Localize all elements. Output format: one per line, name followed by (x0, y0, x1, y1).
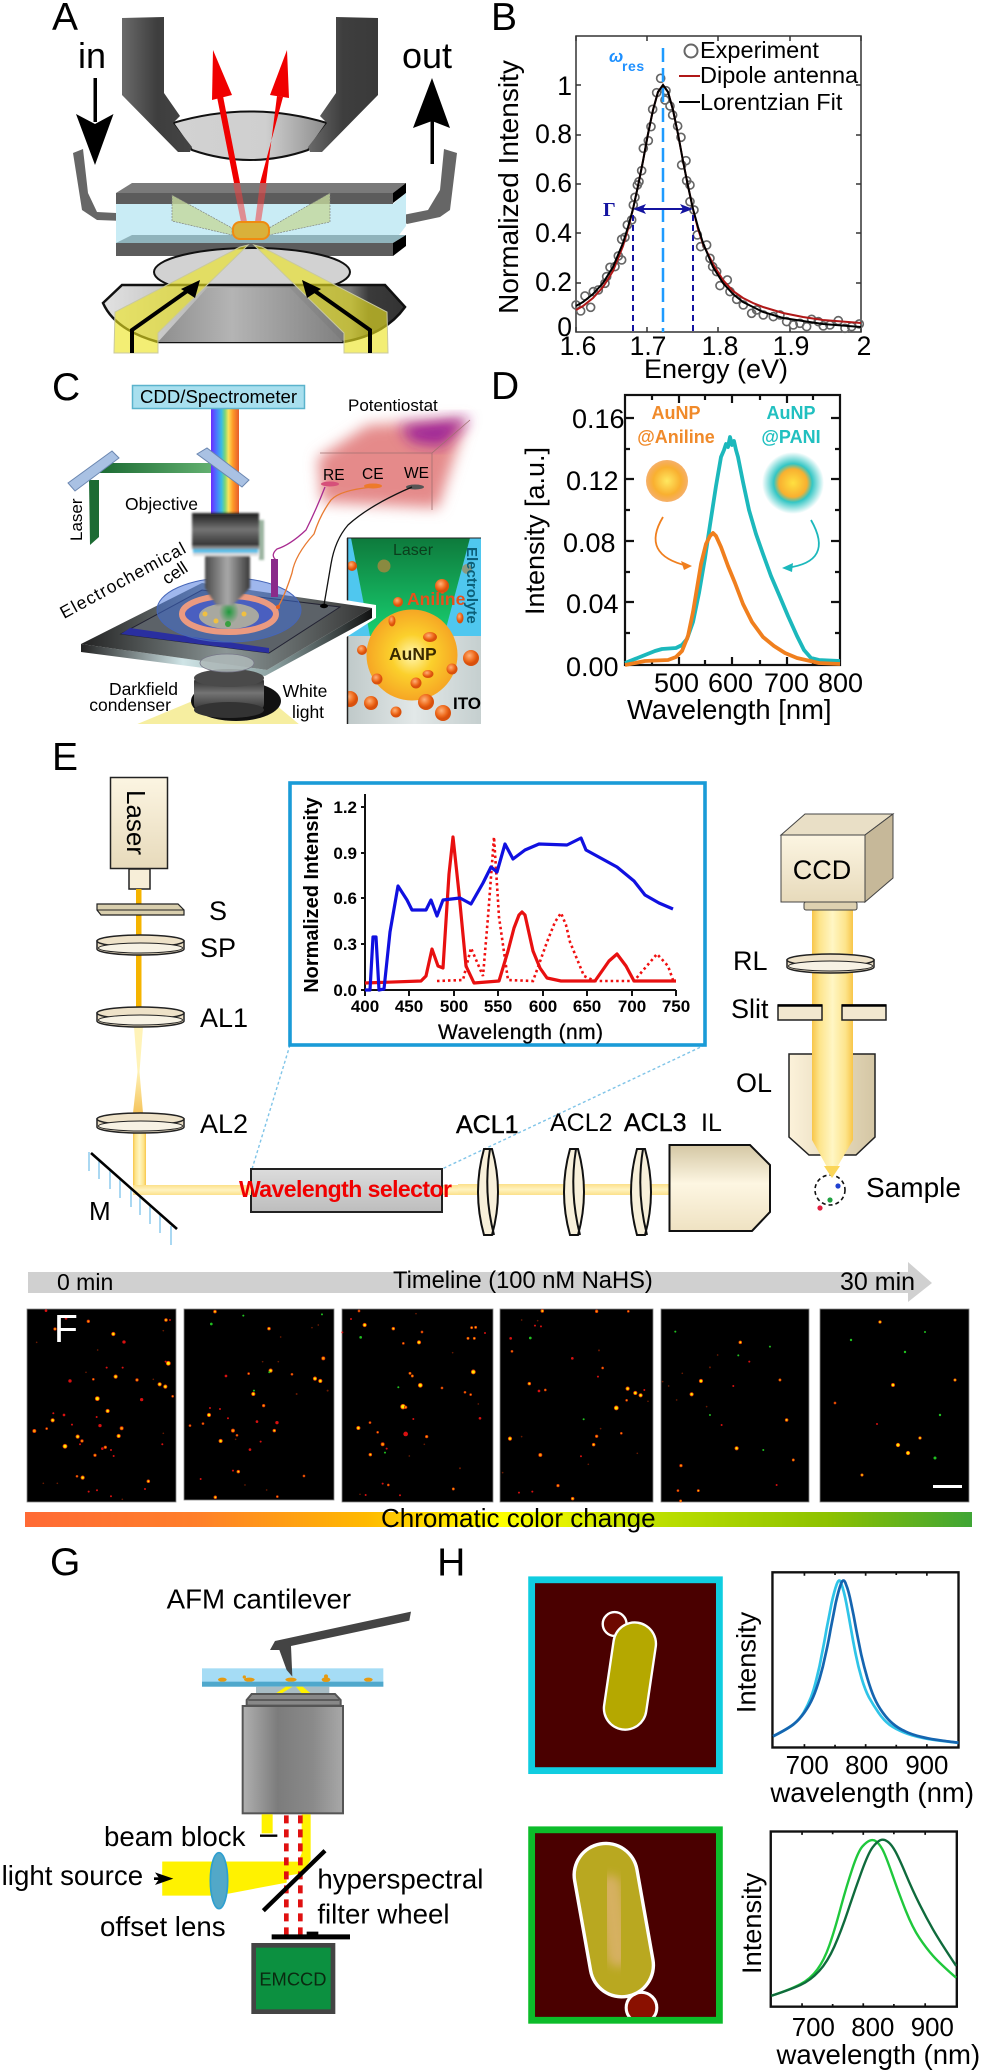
legend: Dipole antenna (700, 62, 859, 88)
dichroic mirror (263, 1851, 325, 1911)
linewidth Gamma marker (603, 199, 693, 332)
legend: Lorentzian Fit (700, 89, 843, 115)
filter wheel: hyperspectral (317, 1863, 483, 1894)
x axis tick labels: 1.7 (630, 331, 666, 361)
label AuNP@Aniline (637, 403, 715, 447)
x axis tick labels: 500 (654, 668, 699, 698)
CCD camera (781, 814, 893, 910)
offset lens: offset lens (100, 1911, 226, 1942)
x ticks: 500 (440, 997, 468, 1016)
x ticks: 700 (618, 997, 646, 1016)
electrochemical cell rings (157, 578, 301, 642)
objective body (243, 1706, 343, 1813)
chart: bottom spectrum: 700 (792, 2014, 835, 2042)
label H: H (437, 1542, 465, 1585)
lens labels: ACL3 (624, 1109, 687, 1137)
reference rod and contact (271, 559, 328, 609)
mirror M (89, 1152, 177, 1245)
chart: top spectrum: 900 (905, 1752, 948, 1780)
chart frame (625, 395, 840, 665)
electrochemical stage (81, 583, 372, 676)
image 5 (661, 1309, 809, 1502)
slit: Slit (731, 994, 769, 1024)
laser source: Laser (121, 790, 151, 855)
y axis tick labels: 0.04 (566, 589, 619, 619)
y axis tick labels (535, 71, 572, 342)
objective lens (122, 17, 378, 160)
darkfield condenser and white light (135, 654, 300, 725)
timeline arrow: 0 min (57, 1269, 113, 1295)
filter wheel (272, 1863, 483, 1939)
chart: top spectrum: wavelength (nm) (769, 1777, 974, 1808)
timeline arrow: 30 min (840, 1268, 915, 1296)
sample (815, 1166, 961, 1211)
inset: AuNP closeup: ITO (453, 694, 481, 713)
x ticks: 600 (529, 997, 557, 1016)
y axis tick labels: 0.16 (572, 404, 625, 434)
lens ACL1 (478, 1149, 498, 1235)
lens AL1: AL1 (200, 1003, 248, 1033)
x ticks: 550 (484, 997, 512, 1016)
chart: bottom spectrum: 800 (851, 2014, 894, 2042)
text: Darkfield condenser: Darkfield (109, 679, 178, 699)
text: White light: White (283, 681, 327, 701)
text: out: out (402, 35, 452, 76)
lens AL2 (97, 1109, 248, 1139)
legend (679, 37, 859, 115)
resonance marker: res (622, 58, 645, 74)
objective OL: OL (736, 1068, 772, 1098)
timeline arrow: Timeline (100 nM NaHS) (393, 1268, 653, 1294)
sphere: AuNP with PANI (762, 452, 824, 514)
label AuNP@PANI: @PANI (761, 427, 821, 447)
text: AFM cantilever: AFM cantilever (167, 1583, 351, 1614)
dotted zoom connectors (252, 1045, 705, 1169)
inset: AuNP closeup: Aniline (407, 589, 466, 609)
x axis tick labels: 1.9 (773, 331, 809, 361)
text: Electrochemical cell: Electrochemical (56, 538, 189, 623)
x title: Wavelength (nm) (438, 1021, 603, 1044)
text: Darkfield condenser (89, 679, 178, 715)
lens ACL3 (631, 1149, 651, 1235)
solid red curve (365, 837, 676, 983)
lens AL2: AL2 (200, 1109, 248, 1139)
cantilever (270, 1612, 411, 1677)
AFM image: top (532, 1580, 719, 1771)
label D: D (491, 365, 519, 408)
chromatic gradient bar (25, 1503, 972, 1533)
y ticks: 0.0 (333, 981, 357, 1000)
inset: AuNP closeup: Electrolyte (463, 547, 480, 624)
timeline arrow (28, 1262, 932, 1302)
chart frame (576, 36, 861, 332)
liquid sample chamber (116, 183, 406, 256)
x axis title: Energy (eV) (644, 354, 788, 384)
mirrors (68, 448, 249, 491)
x axis title: Wavelength [nm] (627, 694, 832, 725)
y axis tick labels: 0.2 (535, 267, 572, 297)
scale bar (933, 1485, 962, 1488)
chart: bottom spectrum: wavelength (nm) (776, 2039, 980, 2070)
arrow: out (413, 78, 450, 164)
lens labels: ACL2 (550, 1109, 613, 1137)
y title: Normalized Intensity (301, 796, 323, 993)
yellow illumination beams (114, 245, 388, 353)
text: Laser: Laser (67, 498, 86, 541)
y axis tick labels: 0.00 (566, 652, 619, 682)
light source and arrow: light source (2, 1860, 143, 1891)
x axis tick labels: 700 (764, 668, 809, 698)
red scattered-light arrows (212, 50, 289, 222)
lens ACL2 (564, 1149, 584, 1235)
text: Objective: Objective (125, 494, 198, 514)
text: Potentiostat: Potentiostat (348, 396, 438, 415)
y axis tick labels: 0.08 (563, 528, 616, 558)
y ticks: 0.9 (333, 844, 357, 863)
yellow-orange input beam (133, 889, 670, 1195)
cyan curve AuNP@PANI (625, 437, 840, 663)
y axis tick labels (563, 404, 625, 682)
panel F: timeline and dark-field images (25, 1262, 972, 1533)
text: Darkfield condenser: condenser (89, 695, 171, 715)
linewidth Gamma marker: Γ (603, 199, 616, 221)
chart: top spectrum: Intensity (730, 1611, 761, 1713)
darkfield condenser (103, 248, 405, 342)
beam block: beam block (104, 1821, 246, 1852)
chart: top spectrum: 700 (786, 1752, 829, 1780)
image 6 (820, 1309, 969, 1502)
imaging lens IL (670, 1145, 770, 1231)
shutter S: S (209, 896, 227, 926)
legend: Experiment (700, 37, 819, 63)
lens RL (733, 946, 874, 976)
CCD camera: CCD (793, 855, 851, 885)
gold nanoparticle (366, 610, 458, 700)
slit (731, 994, 886, 1024)
yellow illumination (162, 1814, 311, 1896)
resonance marker: ω (609, 47, 623, 66)
chart: top spectrum: 800 (845, 1752, 888, 1780)
electrode labels: CE (362, 466, 384, 483)
y ticks: 0.6 (333, 889, 357, 908)
label E: E (52, 736, 78, 779)
text: Electrochemical cell: cell (158, 557, 191, 588)
panel G: AFM hyperspectral setup (2, 1541, 483, 2012)
objective (192, 513, 264, 605)
label AuNP@Aniline: @Aniline (637, 427, 715, 447)
image 2 (184, 1309, 334, 1500)
aniline molecules (342, 561, 479, 721)
experimental data markers (572, 74, 863, 332)
potentiostat box (318, 418, 470, 510)
laser source (110, 778, 168, 889)
inset chart: normalized intensity (290, 783, 705, 1045)
lens RL: RL (733, 946, 768, 976)
CDD/Spectrometer box: CDD/Spectrometer (140, 386, 297, 407)
text: in: in (78, 35, 106, 76)
y axis tick labels: 1 (557, 71, 572, 101)
text: White light (283, 681, 327, 722)
EMCCD (254, 1945, 333, 2012)
green laser path (89, 463, 211, 545)
chart: bottom spectrum: 900 (911, 2014, 954, 2042)
dipole antenna curve (576, 85, 861, 323)
image 1 (27, 1309, 176, 1502)
x axis tick labels: 1.8 (702, 331, 738, 361)
y ticks: 1.2 (333, 798, 357, 817)
image 3 (341, 1309, 493, 1502)
chromatic gradient bar: Chromatic color change (381, 1503, 656, 1533)
chart: bottom spectrum (736, 1832, 980, 2070)
substrate (202, 1668, 383, 1687)
y axis tick labels: 0 (557, 312, 572, 342)
objective OL (736, 1054, 875, 1155)
panel A: dark-field single particle setup (52, 0, 457, 353)
x ticks: 450 (395, 997, 423, 1016)
x axis tick labels (560, 331, 871, 361)
electrode labels: RE (323, 467, 345, 484)
arrow: cyan (782, 520, 819, 572)
panel E: hyperspectral optical layout (52, 736, 961, 1245)
y ticks: 0.3 (333, 935, 357, 954)
chart axes (361, 794, 676, 996)
x ticks: 400 (351, 997, 379, 1016)
x ticks: 650 (573, 997, 601, 1016)
mirror M: M (89, 1196, 111, 1226)
panel H: AFM images and spectra (437, 1542, 980, 2070)
sphere: AuNP with aniline (646, 460, 688, 502)
text: White light: light (292, 702, 324, 722)
inset: AuNP closeup (342, 538, 481, 724)
label C: C (52, 366, 80, 409)
y axis tick labels: 0.6 (535, 168, 572, 198)
orange curve AuNP@Aniline (625, 533, 840, 665)
y axis tick labels: 0.8 (535, 119, 572, 149)
y axis tick labels: 0.4 (535, 218, 572, 248)
objective tip (247, 1687, 341, 1706)
lens labels (456, 1109, 722, 1139)
panel D: spectra of AuNP in aniline and PANI (491, 365, 863, 725)
y axis tick labels: 0.12 (566, 466, 619, 496)
arrow: orange (656, 517, 692, 570)
image 4 (500, 1309, 653, 1502)
y axis title: Intensity [a.u.] (520, 447, 550, 615)
y ticks (333, 798, 357, 1000)
electrode pads (321, 482, 424, 490)
wires (273, 487, 412, 607)
label AuNP@Aniline: AuNP (652, 403, 700, 423)
panel B: normalized intensity spectrum (491, 0, 871, 384)
y axis title: Normalized Intensity (493, 60, 524, 314)
label AuNP@PANI (761, 403, 821, 447)
offset lens (100, 1853, 228, 1942)
lens SP: SP (200, 933, 236, 963)
shutter S (97, 896, 227, 926)
x axis tick labels: 2 (857, 331, 871, 361)
lens labels: ACL1 (456, 1111, 519, 1139)
blue curve (365, 838, 673, 990)
label G: G (50, 1541, 80, 1584)
collection beam (812, 909, 853, 1176)
gray arrow into chamber (73, 149, 136, 224)
x ticks: 750 (662, 997, 690, 1016)
gray arrow out of chamber (393, 149, 457, 224)
inset: AuNP closeup: AuNP (389, 644, 437, 664)
red scattered signal (286, 1815, 300, 1935)
AFM image: bottom (532, 1830, 719, 2023)
lens SP (97, 933, 236, 963)
panel C: electrochemical cell setup (52, 366, 481, 725)
filter wheel: filter wheel (317, 1898, 450, 1929)
x axis tick labels: 1.6 (560, 331, 596, 361)
x ticks (351, 997, 690, 1016)
electrode labels: WE (404, 465, 429, 482)
electrode labels (323, 465, 429, 484)
x axis tick labels (654, 668, 863, 698)
lens labels: IL (701, 1109, 722, 1137)
chart: bottom spectrum: Intensity (736, 1872, 767, 1974)
x axis tick labels: 600 (708, 668, 753, 698)
chart: top spectrum (730, 1572, 974, 1808)
wavelength selector: Wavelength selector (239, 1176, 452, 1202)
rainbow beam (211, 408, 239, 514)
arrow: in (76, 78, 114, 165)
gold nanorod (233, 222, 269, 239)
x axis tick labels: 800 (818, 668, 863, 698)
Lorentzian fit curve (576, 85, 861, 327)
sample: Sample (866, 1172, 961, 1203)
dotted red curve (437, 837, 673, 981)
lens AL1 (97, 1003, 248, 1033)
wavelength selector (239, 1169, 452, 1212)
EMCCD: EMCCD (259, 1969, 327, 1990)
resonance marker (609, 47, 663, 332)
label F: F (54, 1308, 78, 1351)
label AuNP@PANI: AuNP (766, 403, 816, 423)
inset: AuNP closeup: Laser (393, 542, 434, 559)
